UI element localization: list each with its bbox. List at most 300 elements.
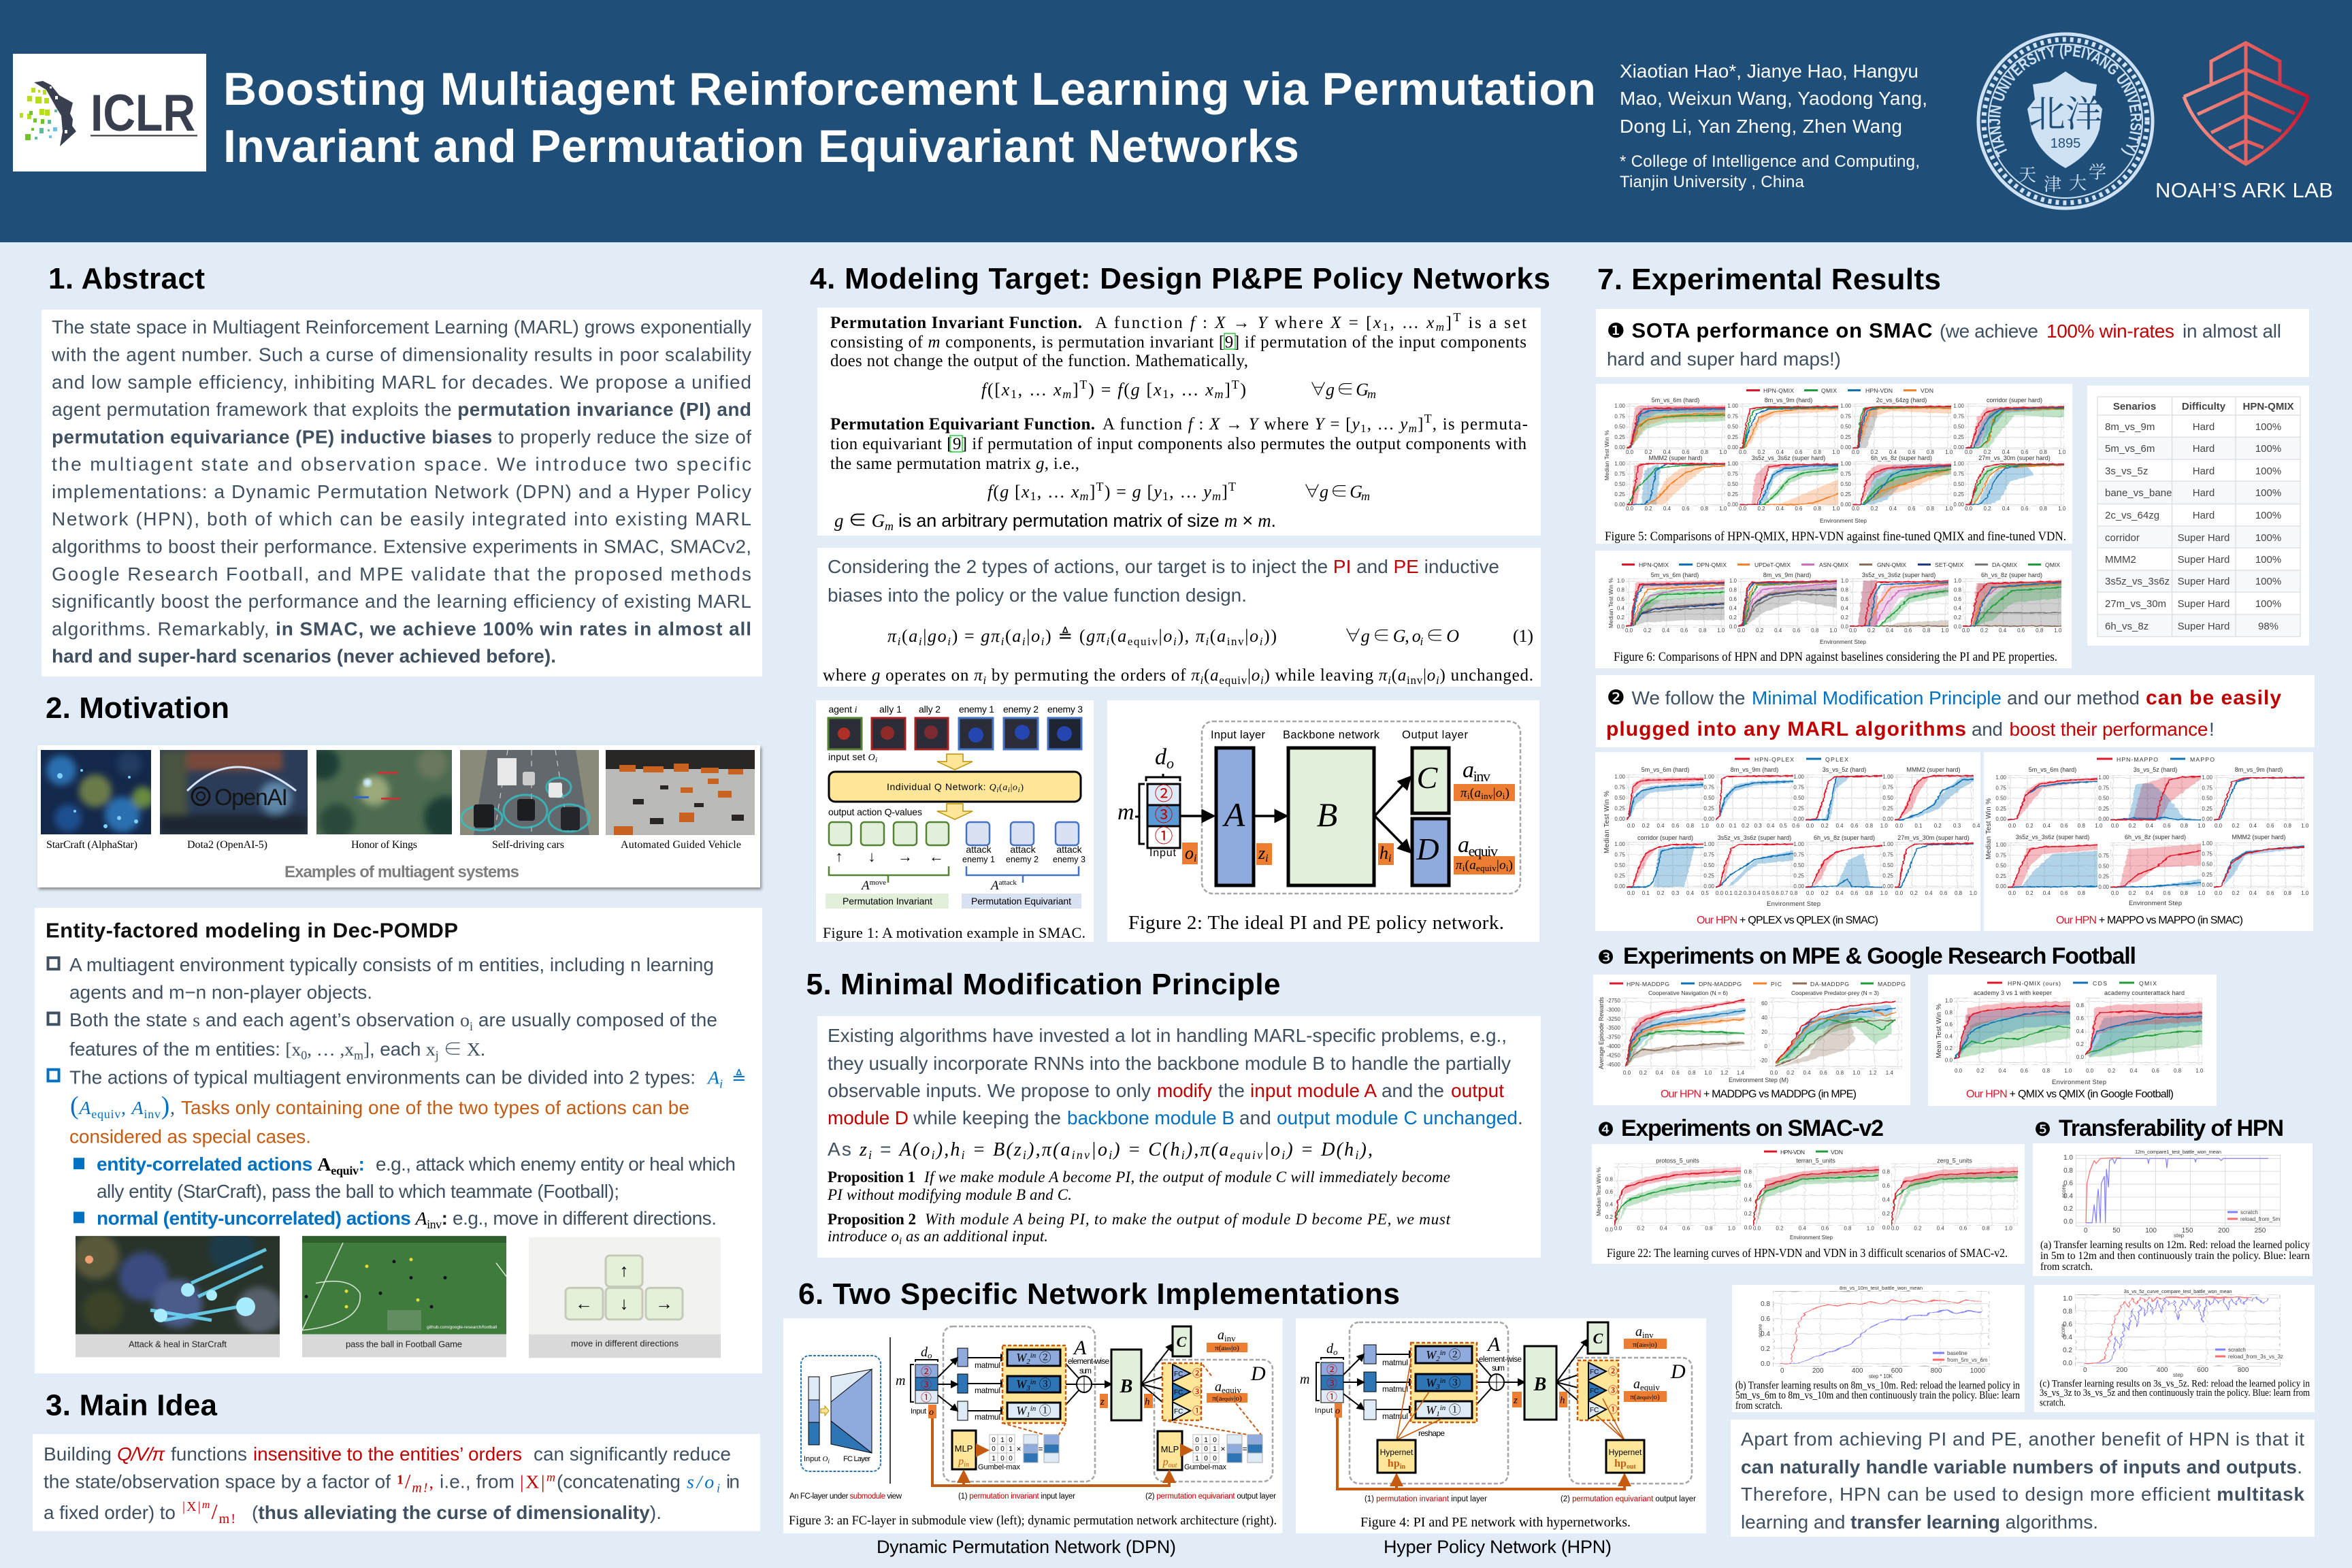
PI input weights — [1002, 1345, 1066, 1423]
panel: PI and PE function definitions: y — [1201, 482, 1211, 502]
panel: injecting PI and PE: o — [1252, 666, 1260, 685]
panel: injecting PI and PE: ) while leaving — [1264, 666, 1378, 685]
caption: Our HPN + QMIX vs QMIX (in Google Football) — [1966, 1089, 2174, 1100]
input stack: d — [1155, 745, 1166, 770]
plot: terran_5_units: 0.8 — [1744, 1169, 1752, 1175]
permutation matrix output: 1 — [1213, 1446, 1217, 1453]
plot: cooperative navigation: -3750 — [1607, 1034, 1621, 1041]
PE FC output layer: FC — [1590, 1369, 1599, 1376]
plot: 27m_vs_30m: 0.25 — [1953, 491, 1965, 497]
plot: MMM2: 0.00 — [1614, 502, 1626, 508]
permutation matrix output: 0 — [1213, 1437, 1217, 1444]
axis ticks: 0.8 — [1761, 1301, 1770, 1308]
panel: abstract: Google Research Football, and MPE validate that the proposed methods — [52, 564, 751, 585]
panel: multitask and transfer learning: learning and transfer learning algorithms. — [1741, 1512, 2098, 1533]
caption — [2040, 1239, 2310, 1273]
PI input weights: in — [1030, 1378, 1036, 1386]
plot: zerg_5_units — [1882, 1157, 2018, 1232]
table: win rates: 3s_vs_5z — [2105, 466, 2148, 477]
permutation matrix output — [1184, 1435, 1262, 1471]
figure 3: dynamic permutation network — [783, 1318, 1282, 1533]
plot: 5m_vs_6m: 0.25 — [1614, 434, 1626, 440]
plot title: 3s_vs_5z_curve_compare_test_battle_won_mean — [2124, 1288, 2232, 1294]
A attack label: A — [991, 879, 999, 893]
bullet text block: , … ,x — [307, 1039, 354, 1060]
plot: corridor: 1.00 — [1614, 841, 1625, 847]
equation 1: gπ — [981, 626, 1000, 646]
plot: 27m_vs_30m: 0.0 0.2 0.4 0.6 0.8 1.0 — [1965, 506, 2066, 512]
plot: academy counterattack hard: 0.0 — [2076, 1054, 2085, 1060]
heading: MPE and GRF: Experiments on MPE & Google Research Football — [1623, 943, 2136, 969]
axis ticks: 0.2 — [2063, 1205, 2073, 1213]
plot: terran_5_units — [1744, 1157, 1879, 1232]
legend — [1746, 387, 1933, 394]
panel: minimal modification statement: and our method — [2007, 687, 2140, 708]
plot: 8m_vs_9m: 1.00 — [1727, 403, 1738, 409]
panel: main idea: m! — [219, 1512, 235, 1526]
plot: 3s5z_vs_3s6z — [1703, 834, 1798, 896]
logo: Tianjin University seal: TIANJIN UNIVERSITY (PEIYANG UNIVERSITY) — [1989, 45, 2142, 158]
equation 1: π — [1196, 626, 1205, 646]
orange labels: o — [1496, 786, 1502, 800]
image: pass the ball in football: github.com/google-research/football — [427, 1325, 497, 1330]
logo: Tianjin University seal: 1895 — [2051, 136, 2080, 151]
equation 1: gπ — [1086, 626, 1106, 646]
plot: MMM2: MMM2 (super hard) — [2232, 834, 2286, 840]
plot: 5m_vs_6m — [1617, 572, 1725, 634]
plot: 6h_vs_8z: 0.0 0.2 0.4 0.6 0.8 1.0 — [1806, 890, 1888, 896]
panel: PI and PE function definitions: x — [1426, 314, 1434, 332]
plot: cooperative navigation: -2750 — [1607, 998, 1620, 1004]
plot: corridor: 0.50 — [1614, 862, 1626, 868]
figure 2: ideal PI and PE network — [1107, 700, 1539, 942]
plot: academy 3 vs 1 with keeper: 0.4 — [1945, 1033, 1953, 1040]
table: win rates: 98% — [2258, 621, 2278, 632]
permutation invariant tag: Permutation Invariant — [843, 896, 932, 906]
plot: 27m_vs_30m: 0.50 — [1882, 862, 1894, 868]
panel: minimal modification principle: i — [1023, 1148, 1026, 1162]
equation 1: ) = — [952, 626, 980, 646]
plot: 8m_vs_9m: 0.50 — [1727, 424, 1739, 430]
plot: cooperative predator-prey: 40 — [1761, 1015, 1768, 1021]
figure b: transfer on 8m_vs_10m — [1732, 1285, 2025, 1412]
equation 1: ) ≜ ( — [1045, 626, 1085, 646]
permutation matrix input: Gumbel-max — [978, 1463, 1021, 1471]
panel: PI and PE function definitions: is a set — [1463, 314, 1526, 332]
panel: abstract: algorithms to boost their performance. Extensive experiments in SMAC, SMACv2, — [52, 536, 751, 557]
figure c: transfer on 3s_vs_5z — [2034, 1285, 2315, 1412]
PE FC output layer: ① — [1192, 1405, 1202, 1416]
panel: minimal modification statement: We follow the — [1632, 687, 1745, 708]
input stack: ① — [1326, 1391, 1337, 1403]
figure 1: motivation example — [816, 700, 1094, 942]
panel: main idea: 1 — [397, 1473, 404, 1487]
legend: DA-MADDPG — [1810, 981, 1849, 987]
orange labels: ( — [1465, 858, 1469, 872]
PI input weights: W — [1016, 1404, 1026, 1418]
MLP p_out: MLP — [1161, 1444, 1179, 1454]
attack labels: attack — [1010, 844, 1036, 855]
plot: 2c_vs_64zg: 0.00 — [1840, 444, 1852, 451]
element-wise sum: element-wise — [1479, 1356, 1522, 1364]
axis ticks: score — [2060, 1324, 2066, 1337]
panel: PI and PE function definitions: Permutation Invariant Function. — [830, 314, 1082, 332]
plot: 2c_vs_64zg: 2c_vs_64zg (hard) — [1876, 397, 1927, 404]
input stack: Input — [1315, 1407, 1333, 1415]
plot: 6h_vs_8z: 0.25 — [1793, 872, 1805, 879]
plot: MMM2: 0.0 0.2 0.4 0.6 0.8 1.0 — [2215, 890, 2309, 896]
plot: 3s_vs_5z: 0.75 — [1793, 784, 1805, 791]
plot: MMM2: 1.00 — [1614, 461, 1625, 467]
PI input weights: 2 — [1026, 1358, 1030, 1366]
image: pass the ball in football: pass the ball in Football Game — [346, 1339, 462, 1349]
plot: 5m_vs_6m — [1995, 766, 2103, 829]
input stack: ③ — [1326, 1377, 1337, 1390]
panel: injecting PI and PE: i — [1436, 674, 1439, 687]
plot: MMM2: 0.25 — [1614, 491, 1626, 497]
MLP p_in: in — [964, 1461, 969, 1469]
panel: PI and PE function definitions: , is permuta- — [1433, 415, 1528, 434]
plot: 27m_vs_30m: 27m_vs_30m (super hard) — [1978, 455, 2051, 461]
orange labels: i — [1388, 853, 1391, 864]
plot: 5m_vs_6m: 0.0 0.2 0.4 0.6 0.8 1.0 — [1625, 627, 1725, 634]
bullet text block: ] — [363, 1039, 370, 1060]
caption: Our HPN + QPLEX vs QPLEX (in SMAC) — [1697, 915, 1878, 926]
plot: 6h_vs_8z: 0.4 — [1954, 606, 1962, 611]
logo: ICLR — [13, 54, 206, 172]
title: Invariant and Permutation Equivariant Networks — [223, 120, 1299, 172]
plot: 27m_vs_30m: 0.50 — [1953, 481, 1965, 487]
heading: 1. Abstract: 1. Abstract — [48, 262, 205, 295]
panel: main idea: i — [717, 1481, 720, 1494]
plot: 27m_vs_30m — [1953, 455, 2066, 512]
plot: 8m_vs_9m — [1703, 766, 1800, 829]
permutation matrix input: 1 — [1009, 1446, 1013, 1453]
PE FC output layer — [1162, 1363, 1202, 1420]
plot: 8m_vs_9m: 0.00 — [1703, 816, 1715, 822]
equation 1: i — [1260, 635, 1263, 648]
table: win rates: 3s5z_vs_3s6z — [2105, 576, 2170, 587]
plot: 8m_vs_9m — [1727, 397, 1840, 455]
panel: minimal modification statement — [1596, 675, 2315, 747]
legend — [1610, 981, 1906, 987]
PE FC output layer: ② — [1608, 1366, 1618, 1377]
FC layer submodule view: FC Layer — [843, 1455, 870, 1463]
sublabels: An FC-layer under submodule view — [789, 1492, 902, 1501]
permutation matrix output: 0 — [1204, 1446, 1208, 1453]
panel: PI and PE function definitions: the same permutation matrix g, i.e., — [830, 455, 1079, 473]
plot: 3s5z_vs_3s6z: 0.00 — [1727, 502, 1739, 508]
panel: minimal modification principle: and — [1239, 1107, 1271, 1128]
plot: zerg_5_units: 0.0 0.2 0.4 0.6 0.8 1.0 — [1891, 1225, 2012, 1232]
panel: PI and PE function definitions: Permutation Equivariant Function. — [830, 415, 1095, 434]
panel: injecting PI and PE: where g operates on π — [823, 666, 983, 685]
figure 6: HPN and DPN against baselines — [1595, 551, 2072, 668]
orange labels: z — [1258, 843, 1265, 863]
z and h tags — [1512, 1392, 1567, 1407]
panel: minimal modification principle: |o — [1091, 1139, 1107, 1160]
plot: 6h_vs_8z: 0.0 0.2 0.4 0.6 0.8 1.0 — [2111, 890, 2206, 896]
permutation matrix input — [978, 1435, 1059, 1471]
panel: minimal modification principle: backbone module B — [1067, 1107, 1235, 1128]
panel: abstract: hard and super-hard scenarios (never achieved before). — [52, 645, 556, 667]
heading: 6. Two Specific Network Implementations: 6. Two Specific Network Implementations — [798, 1277, 1400, 1311]
panel: main idea: in — [726, 1471, 740, 1492]
panel: injecting PI and PE: i — [983, 674, 986, 687]
plot: 5m_vs_6m: 0.0 — [1617, 623, 1625, 630]
permutation invariant tag — [826, 894, 949, 909]
equation 1: ( — [1111, 626, 1116, 646]
a_inv tag: a — [1218, 1328, 1224, 1343]
legend: HPN-MAPPO — [2117, 756, 2158, 763]
image: StarCraft — [41, 750, 151, 834]
module A outline — [1350, 1322, 1508, 1484]
entity tiles — [828, 718, 1081, 749]
equation 1: i — [1106, 635, 1109, 648]
matmul labels — [975, 1360, 1000, 1422]
plot: 5m_vs_6m: 0.8 — [1617, 587, 1625, 593]
caption: Figure 1: A motivation example in SMAC. — [823, 924, 1085, 941]
plot: cooperative navigation: -3500 — [1607, 1025, 1621, 1031]
caption: Our HPN + MADDPG vs MADDPG (in MPE) — [1661, 1089, 1857, 1100]
caption: (a) Transfer learning results on 12m. Red: reload the learned policy — [2040, 1239, 2310, 1251]
panel: injecting PI and PE: ) unchanged. — [1440, 666, 1533, 685]
permuted cells — [958, 1348, 968, 1420]
heading: SMAC-v2: Experiments on SMAC-v2 — [1621, 1115, 1884, 1141]
plot: protoss_5_units: 0.0 0.2 0.4 0.6 0.8 1.0 — [1614, 1225, 1735, 1232]
heading: 4. Modeling Target: 4. Modeling Target: Design PI&PE Policy Networks — [810, 262, 1550, 295]
module C — [1412, 748, 1449, 813]
plot: 5m_vs_6m: 1.00 — [1614, 774, 1625, 780]
panel: minimal modification statement: ❷ — [1607, 686, 1625, 710]
a_equiv tag: π(aequiv|o) — [1212, 1394, 1242, 1403]
module C: C — [1177, 1333, 1187, 1350]
plot: corridor: 0.50 — [1953, 424, 1965, 430]
y axis label: Mean Test Win % — [1936, 1004, 1943, 1058]
PE FC output layer: FC — [1174, 1408, 1183, 1416]
panel: main idea: |X| — [520, 1472, 544, 1492]
input stack: ② — [921, 1366, 932, 1378]
heading: 3. Main Idea: 3. Main Idea — [46, 1389, 218, 1422]
entity labels: enemy 3 — [1047, 704, 1083, 715]
plot: 3s_vs_5z: 0.25 — [2098, 806, 2110, 812]
panel: PI and PE function definitions: A function f : X → Y where Y = [y — [1102, 415, 1360, 434]
A attack label: attack — [999, 879, 1017, 887]
equation 1: o — [1250, 626, 1258, 646]
panel: minimal modification principle: = — [873, 1139, 898, 1160]
PI input weights: in — [1440, 1377, 1446, 1385]
a_equiv: a — [1458, 832, 1469, 858]
permutation matrix output: 1 — [1204, 1437, 1208, 1444]
panel: PI and PE function definitions: 1 — [1162, 387, 1169, 401]
plot: 3s5z_vs_3s6z: 3s5z_vs_3s6z (super hard) — [2016, 834, 2089, 840]
z and h tags — [1100, 1394, 1153, 1408]
PI input weights: W — [1016, 1351, 1026, 1365]
legend: HPN-VDN — [1865, 387, 1893, 394]
permutation matrix output: 0 — [1195, 1446, 1199, 1453]
entity labels — [829, 704, 1083, 715]
panel: injecting PI and PE: | — [1247, 666, 1251, 685]
bullet text block: ∈ X. — [438, 1039, 485, 1060]
module B — [1524, 1346, 1556, 1420]
equation 1: i — [1205, 635, 1209, 648]
module C — [1173, 1326, 1191, 1356]
legend: DA-QMIX — [1992, 561, 2017, 568]
hypernet hp_in: in — [1400, 1463, 1406, 1471]
authors and affiliation: Mao, Weixun Wang, Yaodong Yang, — [1620, 88, 1927, 109]
entity labels: ally 2 — [919, 704, 941, 715]
panel: PI and PE function definitions: y — [1398, 415, 1408, 434]
layer labels — [1211, 729, 1469, 741]
layer labels: Output layer — [1402, 729, 1469, 741]
module D: D — [1416, 832, 1439, 866]
plot: MMM2: 0.00 — [2202, 882, 2213, 888]
plot: MMM2: 0.50 — [1614, 481, 1626, 487]
panel: minimal modification principle: i — [868, 1148, 872, 1162]
table: win rates: HPN-QMIX — [2243, 401, 2293, 412]
a_equiv tag: equiv — [1222, 1385, 1241, 1395]
plot: 3s_vs_5z: 3s_vs_5z (hard) — [1823, 766, 1866, 773]
panel: PI and PE function definitions: T — [1424, 412, 1432, 425]
plot: 5m_vs_6m: 0.0 0.2 0.4 0.6 0.8 1.0 — [1627, 823, 1709, 829]
legend: HPN-QMIX — [1639, 561, 1669, 568]
bullet text block: equiv — [331, 1164, 359, 1177]
plot title: 12m_compare1_test_battle_won_mean — [2135, 1149, 2221, 1155]
PE FC output layer: FC — [1174, 1389, 1183, 1396]
panel: multitask and transfer learning — [1731, 1420, 2315, 1537]
bullet text block: A multiagent environment typically consists of m entities, including n learning — [69, 954, 714, 975]
table: win rates — [2087, 385, 2309, 645]
panel: minimal modification principle: module D — [828, 1107, 909, 1128]
plot: 5m_vs_6m: 1.00 — [1614, 403, 1625, 409]
plot: 5m_vs_6m: 5m_vs_6m (hard) — [2029, 766, 2076, 773]
move action boxes — [829, 822, 949, 845]
plot — [2075, 1294, 2281, 1367]
input stack: ② — [1326, 1364, 1337, 1376]
matmul labels: matmul — [1382, 1358, 1408, 1367]
input stack: m — [1300, 1372, 1309, 1387]
panel: minimal modification principle: As z — [828, 1139, 867, 1160]
plot: 6h_vs_8z: 0.0 0.2 0.4 0.6 0.8 1.0 — [1962, 627, 2062, 634]
FC layer submodule view: i — [828, 1458, 830, 1465]
legend: DPN-QMIX — [1697, 561, 1727, 568]
table: win rates: 100% — [2255, 598, 2281, 610]
plot: zerg_5_units: 0.4 — [1882, 1196, 1891, 1203]
legend: HPN-QMIX (ours) — [2008, 980, 2061, 987]
equation 1 — [887, 626, 1533, 648]
plot: protoss_5_units: protoss_5_units — [1656, 1157, 1699, 1164]
panel: main idea: Q/V/π — [117, 1443, 165, 1465]
plot: 27m_vs_30m: 0.75 — [1882, 852, 1894, 858]
input stack: m — [896, 1373, 905, 1388]
input stack: ② — [1154, 784, 1173, 804]
plot: 8m_vs_9m: 1.00 — [1703, 774, 1714, 780]
plot: 5m_vs_6m: 0.50 — [1614, 424, 1626, 430]
x axis label: Environment Step — [1767, 900, 1820, 908]
plot: 6h_vs_8z — [1793, 834, 1888, 896]
permutation matrix input: 1 — [1000, 1437, 1004, 1444]
PI input weights: ① — [1036, 1404, 1051, 1418]
sublabels: (2) permutation equivariant output layer — [1145, 1492, 1276, 1501]
plot: cooperative predator-prey: 0.0 0.2 0.4 0.6 0.8 1.0 1.2 1.4 — [1770, 1070, 1893, 1076]
element-wise sum: element-wise — [1068, 1358, 1109, 1366]
panel: PI and PE function definitions: ] — [1418, 415, 1423, 434]
y axis label: Average Episode Rewards — [1598, 996, 1605, 1069]
plot: 27m_vs_30m: 1.00 — [1882, 841, 1893, 847]
image: move in different directions keys: ← — [575, 1294, 593, 1313]
PI input weights: ② — [1036, 1351, 1051, 1365]
image: move in different directions keys: move in different directions — [571, 1339, 679, 1348]
orange labels: i — [1194, 853, 1196, 864]
plot: 6h_vs_8z: 1.0 — [1954, 578, 1961, 584]
panel: main idea: a fixed order) to — [44, 1502, 176, 1523]
plot: 8m_vs_9m — [1729, 572, 1838, 634]
orange labels: | — [1493, 786, 1496, 800]
panel: PI and PE function definitions: 1 — [1360, 422, 1366, 435]
matmul labels: matmul — [975, 1412, 1000, 1422]
panel: PI and PE function definitions: ) = — [1088, 380, 1117, 399]
panel: minimal modification principle: i — [932, 1148, 935, 1162]
input stack — [1117, 745, 1180, 859]
plot: MMM2: 1.00 — [2202, 840, 2212, 847]
a_equiv tag — [1207, 1379, 1247, 1403]
plot: 3s_vs_5z: 0.75 — [2098, 785, 2110, 791]
legend: QPLEX — [1825, 756, 1848, 763]
panel: minimal modification principle: introduce o — [828, 1228, 899, 1245]
plot: MMM2: 0.0 0.1 0.2 0.3 0.4 — [1895, 823, 1980, 829]
authors and affiliation: Xiaotian Hao*, Jianye Hao, Hangyu — [1620, 61, 1918, 82]
table: win rates: 100% — [2255, 510, 2281, 521]
panel: main idea: s/o — [687, 1472, 714, 1492]
panel: SOTA performance on SMAC: 100% win-rates — [2046, 321, 2174, 342]
panel: PI and PE function definitions: T — [1228, 480, 1236, 493]
plot: 8m_vs_9m: 8m_vs_9m (hard) — [2235, 766, 2283, 773]
plot: zerg_5_units: zerg_5_units — [1937, 1157, 1972, 1164]
plot legend: scratch — [2240, 1209, 2258, 1215]
panel: PI and PE function definitions: m — [1361, 489, 1370, 503]
panel: minimal modification principle: Proposition 2 — [828, 1211, 916, 1228]
plot: 27m_vs_30m: 0.00 — [1953, 502, 1965, 508]
panel: minimal modification principle: i — [1109, 1148, 1112, 1162]
plot: 5m_vs_6m: 1.00 — [1995, 774, 2006, 781]
plot: 3s5z_vs_3s6z: 0.0 — [1841, 623, 1849, 630]
PE FC output layer: ② — [1192, 1368, 1202, 1379]
panel: main idea: (thus alleviating the curse of dimensionality). — [252, 1502, 662, 1523]
panel: abstract: agent permutation framework that exploits the permutation invariance (PI) and — [52, 399, 751, 420]
z and h tags: h — [1145, 1396, 1150, 1407]
orange labels: π — [1460, 786, 1467, 800]
bullet text block: : — [442, 1207, 448, 1228]
orange labels: i — [1503, 791, 1505, 801]
plot: 3s5z_vs_3s6z: 0.4 — [1841, 606, 1849, 611]
caption: Figure 5: Comparisons of HPN-QMIX, HPN-VDN against fine-tuned QMIX and fine-tuned VDN. — [1605, 530, 2066, 544]
legend — [1987, 980, 2157, 987]
plot: 3s5z_vs_3s6z: 1.0 — [1841, 578, 1848, 584]
module B: B — [1120, 1376, 1132, 1397]
equation 1: i — [1173, 635, 1177, 648]
plot: 5m_vs_6m: 0.50 — [1614, 795, 1626, 801]
axis ticks: 0.6 — [2063, 1180, 2073, 1188]
plot: 3s5z_vs_3s6z: 0.2 — [1841, 615, 1849, 621]
table: win rates: Hard — [2193, 487, 2215, 499]
dashed network outline — [1202, 721, 1520, 894]
attack labels: attack — [966, 844, 992, 855]
plot: 8m_vs_9m: 0.25 — [1727, 434, 1739, 440]
image: Honor of Kings — [316, 750, 452, 834]
plot: 27m_vs_30m: 0.00 — [1882, 883, 1894, 889]
orange labels — [1182, 784, 1515, 875]
image: move in different directions keys — [529, 1237, 721, 1358]
